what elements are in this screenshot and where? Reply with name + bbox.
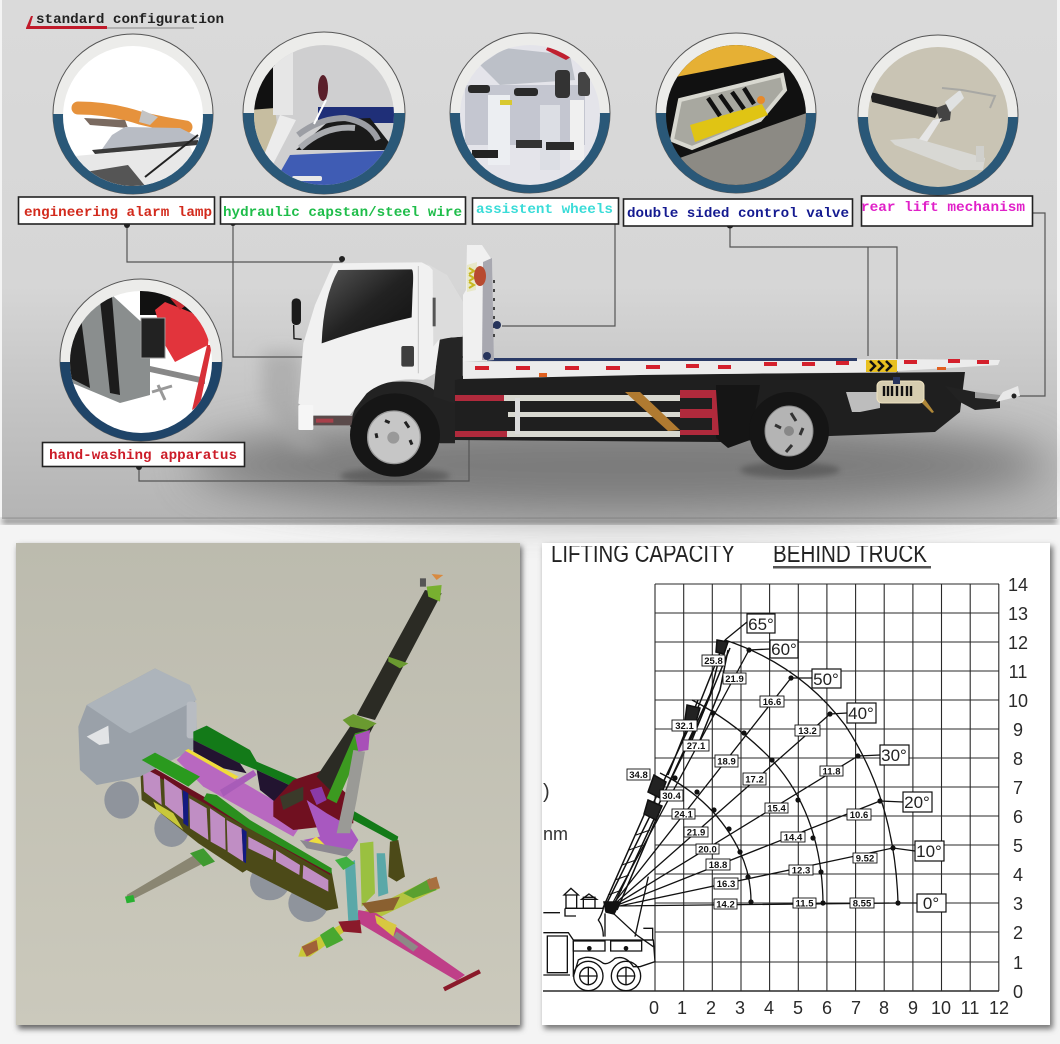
y axis labels: 14 [1008,575,1028,595]
side guard rails [454,390,719,437]
angle labels: 10° [916,842,942,861]
label: hydraulic capstan/steel wire: hydraulic capstan/steel wire [223,205,462,221]
y axis labels: 11 [1009,662,1027,682]
label: engineering alarm lamp: engineering alarm lamp [24,205,212,221]
y axis labels: 7 [1013,778,1023,798]
panel: standard configuration truck diagram [2,0,1057,524]
y axis labels: 10 [1008,691,1028,711]
angle labels [747,614,946,913]
x axis labels: 3 [735,998,745,1018]
x axis labels: 5 [793,998,803,1018]
y axis labels: 12 [1008,633,1028,653]
y axis labels: 8 [1013,749,1023,769]
load value labels: 18.8 [709,860,727,871]
chart title: BEHIND TRUCK [773,540,927,568]
angle labels: 65° [748,615,774,634]
load value labels: 30.4 [662,791,681,802]
angle labels: 40° [848,704,874,723]
y axis labels: 3 [1013,894,1023,914]
angle labels: 20° [904,793,930,812]
crane boom positions [603,640,730,914]
rear wheel [749,392,829,470]
load value labels: 11.8 [823,766,840,778]
load value labels: 15.4 [767,804,786,814]
rear outriggers [298,877,480,989]
angle labels: 30° [881,746,907,765]
partial unit marks: ) [543,781,550,803]
label: hand-washing apparatus [42,442,244,466]
load value labels: 8.55 [853,898,872,910]
y axis labels: 9 [1013,720,1023,740]
x axis labels: 2 [706,998,716,1018]
label: engineering alarm lamp [18,197,214,224]
load value labels: 27.1 [687,741,706,752]
partial unit marks [543,781,568,844]
load value labels: 20.0 [698,844,717,856]
x axis labels: 8 [879,998,889,1018]
chassis [440,372,965,442]
label: rear lift mechanism: rear lift mechanism [861,200,1025,216]
rear lift and tail [846,377,1020,413]
x axis labels: 0 [649,998,659,1018]
load value labels: 16.3 [717,879,735,890]
heading: standard configuration: standard configuration [36,12,224,28]
load value labels: 21.9 [725,674,744,685]
chart title [552,546,927,562]
y axis labels: 4 [1013,865,1023,885]
angle labels: 0° [923,894,939,913]
load value labels: 32.1 [675,721,694,732]
x axis labels: 9 [908,998,918,1018]
label: assistant wheels [472,198,618,224]
angle labels: 60° [771,640,797,659]
load value labels: 34.8 [629,770,648,781]
partial unit marks: nm [543,824,568,844]
load value labels: 10.6 [850,810,868,821]
cab [292,262,463,477]
y axis labels: 0 [1013,982,1023,1002]
load value labels: 21.9 [687,828,705,838]
panel: lifting capacity chart [542,540,1053,1029]
x axis labels: 6 [822,998,832,1018]
y axis labels: 1 [1013,953,1023,973]
load value labels: 12.3 [792,866,810,876]
load value labels: 17.2 [745,774,764,786]
photo circle: double sided control valve [656,33,816,193]
photo circle: rear lift mechanism [858,35,1018,195]
crane boom [310,574,443,833]
label: hydraulic capstan/steel wire [220,197,466,224]
y axis labels: 5 [1013,836,1023,856]
x axis labels: 4 [764,998,774,1018]
angle labels: 50° [813,670,839,689]
left outrigger [125,848,215,903]
chart grid [543,584,999,991]
load value labels: 24.1 [674,810,693,820]
photo circle: hand-washing apparatus [60,279,222,441]
x axis labels: 7 [851,998,861,1018]
panel: 3D model of crane truck [16,543,522,1029]
wheels [104,781,328,922]
truck line drawing [543,877,655,991]
body [140,760,338,911]
load value labels: 16.6 [763,697,781,708]
y axis labels: 2 [1013,923,1023,943]
x axis labels: 11 [961,998,979,1018]
headboard [463,245,501,362]
label: rear lift mechanism [861,196,1032,226]
photo circle: engineering alarm lamp [53,34,213,194]
load value labels [627,655,877,910]
connector lines [124,210,1045,481]
y axis labels [1008,575,1028,1002]
load rays and arcs [610,622,917,908]
photo circle: assistant wheels [450,33,610,193]
load value labels: 11.5 [796,898,814,910]
x axis labels: 10 [931,998,951,1018]
truck: flatbed wrecker side view [292,245,1020,477]
load value labels: 18.9 [717,756,736,768]
label: hand-washing apparatus: hand-washing apparatus [49,448,237,464]
y axis labels: 6 [1013,807,1023,827]
load value labels: 14.4 [784,832,803,844]
load value labels: 9.52 [856,854,874,864]
y axis labels: 13 [1008,604,1028,624]
load value labels: 14.2 [716,900,735,910]
label: assistant wheels: assistent wheels [476,202,613,218]
label: double sided control valve [624,199,852,226]
label: double sided control valve: double sided control valve [627,206,849,222]
load value labels: 25.8 [704,656,723,667]
chart title: LIFTING CAPACITY [551,540,735,568]
x axis labels [649,998,1009,1018]
crane base [273,771,358,857]
photo circle: hydraulic capstan [243,32,405,194]
rear cylinders and frame [335,842,400,933]
flatbed deck [463,358,1000,379]
x axis labels: 12 [989,998,1009,1018]
deck and rails [142,726,405,882]
cab [78,668,198,785]
load value labels: 13.2 [798,726,817,737]
x axis labels: 1 [677,998,687,1018]
